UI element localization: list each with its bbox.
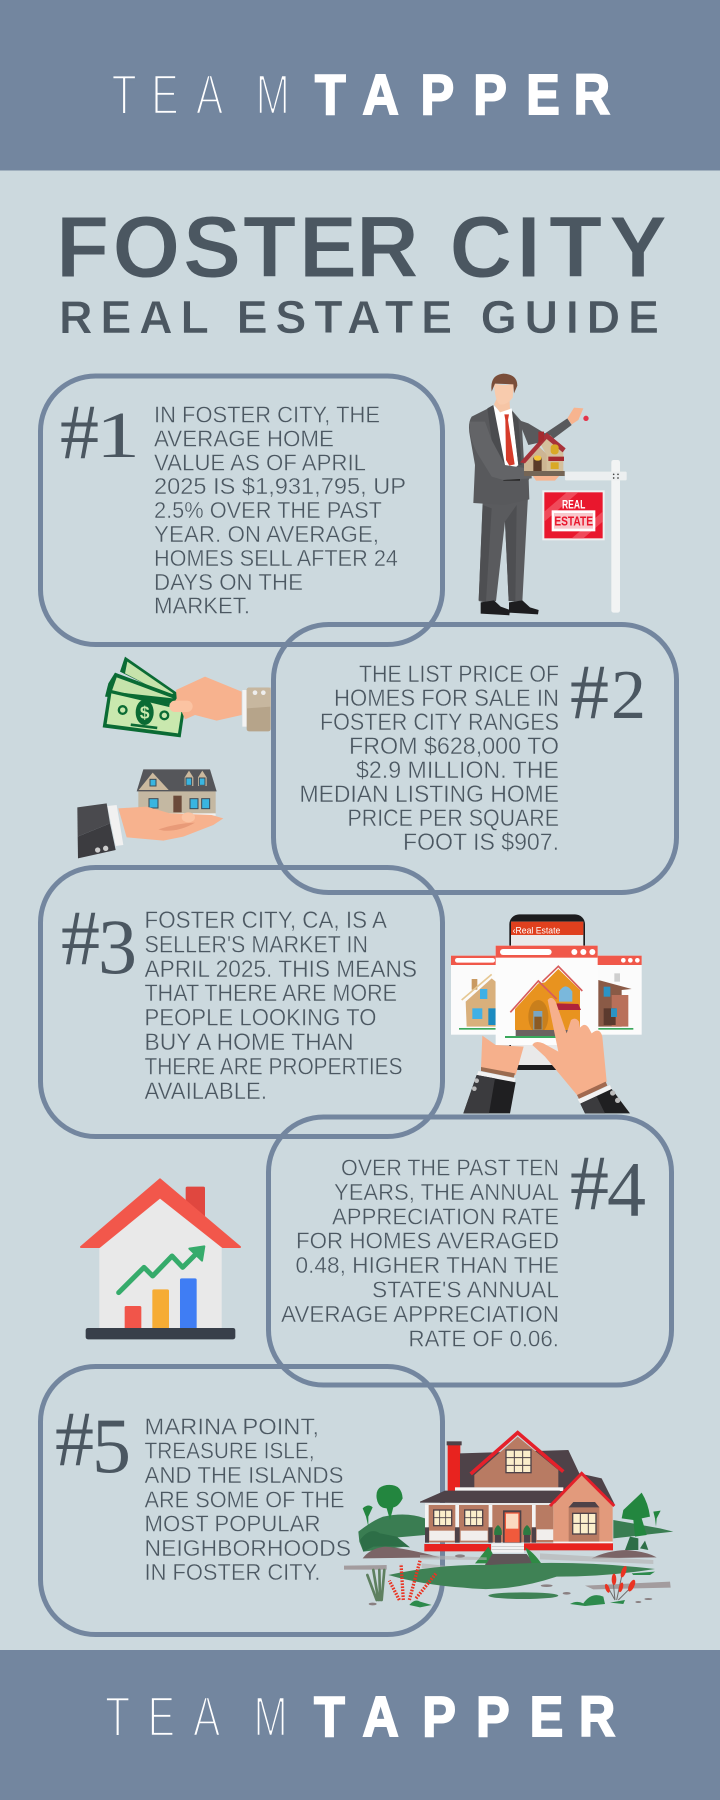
text block 2: FROM $628,000 TO bbox=[349, 733, 559, 760]
text block 3: THAT THERE ARE MORE bbox=[144, 980, 397, 1007]
text block 2: PRICE PER SQUARE bbox=[348, 805, 559, 832]
text block 3: PEOPLE LOOKING TO bbox=[144, 1005, 376, 1032]
text block 2: HOMES FOR SALE IN bbox=[334, 685, 559, 712]
icon: agent with real estate sign bbox=[469, 374, 627, 615]
number 4: # bbox=[570, 1139, 609, 1226]
number 5 bbox=[55, 1395, 131, 1489]
number 5: # bbox=[55, 1395, 94, 1482]
footer band with logo bbox=[0, 1650, 720, 1800]
text block 5: AND THE ISLANDS bbox=[144, 1462, 344, 1488]
text block 4: APPRECIATION RATE bbox=[332, 1203, 559, 1229]
text block 3: APRIL 2025. THIS MEANS bbox=[144, 956, 417, 983]
text block 3 bbox=[144, 907, 417, 1105]
panel: fact 4 bbox=[268, 1117, 672, 1385]
text block 4: 0.48, HIGHER THAN THE bbox=[296, 1252, 559, 1278]
number 4: 4 bbox=[607, 1146, 646, 1233]
title: FOSTER CITY bbox=[56, 199, 667, 296]
icon: phone with house listings bbox=[451, 914, 642, 1113]
number 1: # bbox=[60, 388, 99, 475]
text block 3: SELLER'S MARKET IN bbox=[144, 931, 368, 958]
number 1 bbox=[60, 388, 140, 475]
icon: phone with house listings: ‹Real Estate bbox=[513, 925, 560, 935]
text block 4: AVERAGE APPRECIATION bbox=[281, 1301, 559, 1327]
icon: hand holding money: $ bbox=[140, 703, 150, 723]
text block 3: FOSTER CITY, CA, IS A bbox=[144, 907, 387, 934]
text block 5: NEIGHBORHOODS bbox=[144, 1535, 351, 1561]
text block 4: RATE OF 0.06. bbox=[408, 1325, 559, 1351]
text block 5 bbox=[144, 1413, 351, 1585]
text block 1: AVERAGE HOME bbox=[154, 425, 334, 451]
text block 5: MOST POPULAR bbox=[144, 1511, 320, 1537]
number 4 bbox=[570, 1139, 646, 1233]
panel: fact 3 bbox=[40, 868, 442, 1136]
header band with logo bbox=[0, 0, 720, 170]
panel: fact 2 bbox=[274, 624, 676, 892]
number 1: 1 bbox=[96, 399, 140, 472]
text block 5: MARINA POINT, bbox=[144, 1413, 319, 1439]
header band with logo: TAPPER bbox=[315, 63, 610, 127]
text block 2 bbox=[300, 661, 559, 856]
text block 2: THE LIST PRICE OF bbox=[359, 661, 559, 688]
icon: suburban house with garden bbox=[344, 1433, 673, 1607]
text block 1: HOMES SELL AFTER 24 bbox=[154, 545, 398, 571]
text block 5: ARE SOME OF THE bbox=[144, 1486, 344, 1512]
footer band with logo: TEAM bbox=[105, 1684, 288, 1749]
text block 2: MEDIAN LISTING HOME bbox=[300, 781, 559, 808]
number 2 bbox=[570, 648, 646, 735]
icon: agent with real estate sign: ESTATE bbox=[554, 515, 593, 529]
icon: hand holding money bbox=[103, 657, 271, 737]
text block 1: IN FOSTER CITY, THE bbox=[154, 402, 380, 428]
text block 3: THERE ARE PROPERTIES bbox=[144, 1053, 402, 1080]
text block 5: TREASURE ISLE, bbox=[144, 1438, 314, 1464]
icon: agent with real estate sign: REAL bbox=[562, 498, 585, 512]
header band with logo: TEAM bbox=[112, 62, 290, 127]
text block 3: AVAILABLE. bbox=[144, 1078, 267, 1105]
text block 1: 2.5% OVER THE PAST bbox=[154, 497, 382, 523]
text block 4: STATE'S ANNUAL bbox=[372, 1276, 559, 1302]
subtitle: REAL ESTATE GUIDE bbox=[59, 291, 659, 343]
text block 1 bbox=[154, 402, 406, 619]
icon: house with growth chart bbox=[81, 1179, 240, 1339]
icon: hand holding house bbox=[77, 769, 223, 858]
text block 1: 2025 IS $1,931,795, UP bbox=[154, 473, 406, 499]
title bbox=[56, 199, 667, 343]
text block 4: FOR HOMES AVERAGED bbox=[296, 1228, 559, 1254]
panel: fact 5 bbox=[40, 1366, 442, 1634]
text block 4 bbox=[281, 1154, 559, 1351]
text block 1: YEAR. ON AVERAGE, bbox=[154, 521, 379, 547]
text block 1: DAYS ON THE bbox=[154, 569, 303, 595]
panel: fact 1 bbox=[40, 376, 442, 644]
number 5: 5 bbox=[92, 1402, 131, 1489]
footer band with logo: TAPPER bbox=[314, 1685, 615, 1749]
text block 2: FOOT IS $907. bbox=[403, 829, 559, 856]
number 3 bbox=[61, 894, 137, 990]
text block 3: BUY A HOME THAN bbox=[144, 1029, 354, 1056]
number 3: 3 bbox=[98, 903, 137, 990]
text block 1: MARKET. bbox=[154, 593, 250, 619]
text block 2: FOSTER CITY RANGES bbox=[320, 709, 559, 736]
text block 1: VALUE AS OF APRIL bbox=[154, 449, 366, 475]
text block 4: YEARS, THE ANNUAL bbox=[334, 1179, 559, 1205]
number 3: # bbox=[61, 894, 100, 981]
number 2: # bbox=[570, 648, 609, 735]
number 2: 2 bbox=[611, 657, 646, 734]
text block 4: OVER THE PAST TEN bbox=[341, 1154, 559, 1180]
text block 2: $2.9 MILLION. THE bbox=[356, 757, 559, 784]
text block 5: IN FOSTER CITY. bbox=[144, 1559, 320, 1585]
